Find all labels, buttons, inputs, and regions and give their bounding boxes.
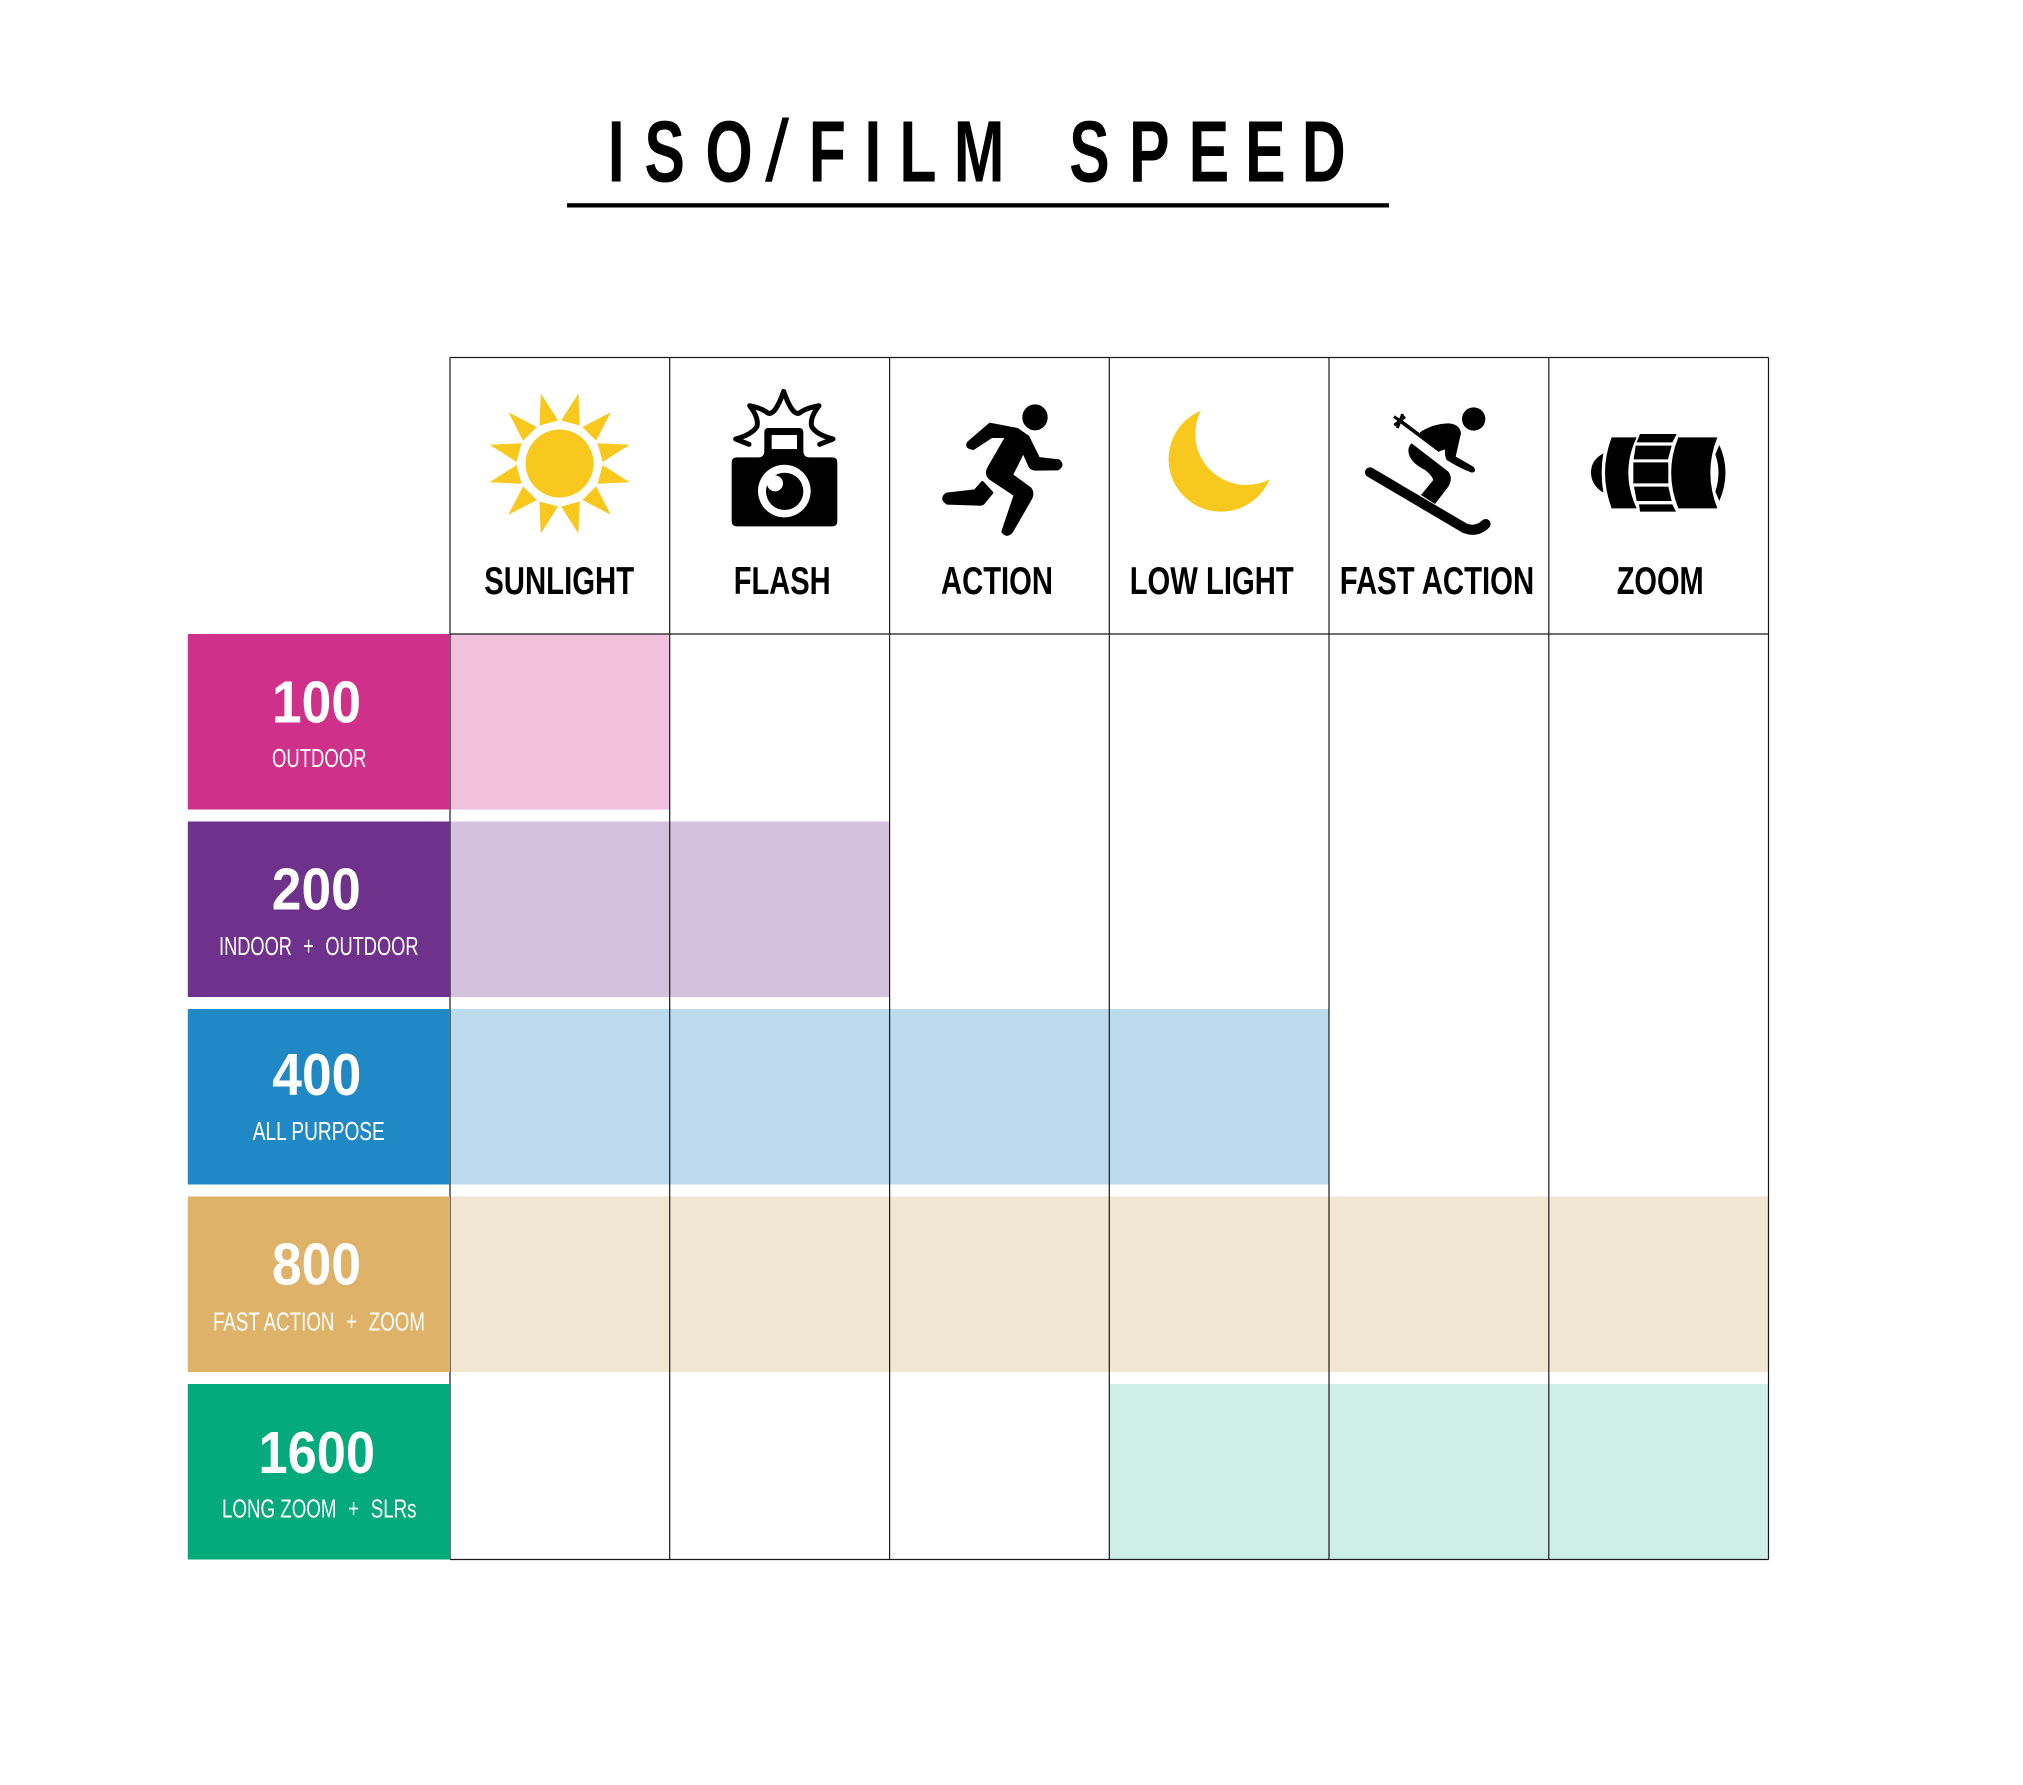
row tint: 100 [450, 634, 670, 810]
title: FILM SPEED [809, 103, 1346, 200]
row label: 800 fast action + zoom: 800 [272, 1232, 361, 1298]
column label: low light: LOW LIGHT [1130, 560, 1294, 603]
row label: 1600 long zoom + SLRs: 1600 [258, 1420, 375, 1486]
row tint: 1600 [1109, 1384, 1768, 1560]
row label: 800 fast action + zoom [188, 1196, 450, 1372]
row label: 100 outdoor [188, 634, 450, 810]
icon: zoom lens [1591, 434, 1725, 512]
row label: 200 indoor + outdoor: 200 [272, 856, 361, 922]
icon: running person [943, 406, 1061, 534]
row label: 400 all purpose [188, 1009, 450, 1184]
column label: action: ACTION [941, 560, 1053, 603]
row tint: 400 [450, 1009, 1329, 1184]
column label: flash: FLASH [734, 560, 831, 603]
icon: camera with flash [732, 391, 837, 526]
column label: fast action: FAST ACTION [1340, 560, 1534, 603]
icon: skier [1370, 407, 1486, 530]
row label: 800 fast action + zoom: FAST ACTION + ZOOM [213, 1306, 425, 1336]
row label: 100 outdoor: OUTDOOR [272, 743, 366, 773]
column label: sunlight: SUNLIGHT [484, 560, 634, 603]
row label: 1600 long zoom + SLRs: LONG ZOOM + SLRs [222, 1494, 416, 1524]
row tint: 200 [450, 822, 890, 997]
row label: 200 indoor + outdoor [188, 822, 450, 997]
column label: zoom: ZOOM [1617, 560, 1704, 603]
row label: 200 indoor + outdoor: INDOOR + OUTDOOR [219, 931, 418, 961]
icon: sun [489, 393, 630, 534]
icon: crescent moon [1169, 411, 1270, 512]
row label: 100 outdoor: 100 [272, 669, 361, 735]
row tint: 800 [450, 1196, 1768, 1372]
row label: 400 all purpose: 400 [272, 1042, 361, 1108]
table grid [450, 358, 1768, 1560]
row label: 1600 long zoom + SLRs [188, 1384, 450, 1560]
row label: 400 all purpose: ALL PURPOSE [253, 1116, 385, 1146]
title: ISO [608, 103, 753, 200]
title [567, 103, 1389, 208]
title: / [765, 103, 790, 200]
